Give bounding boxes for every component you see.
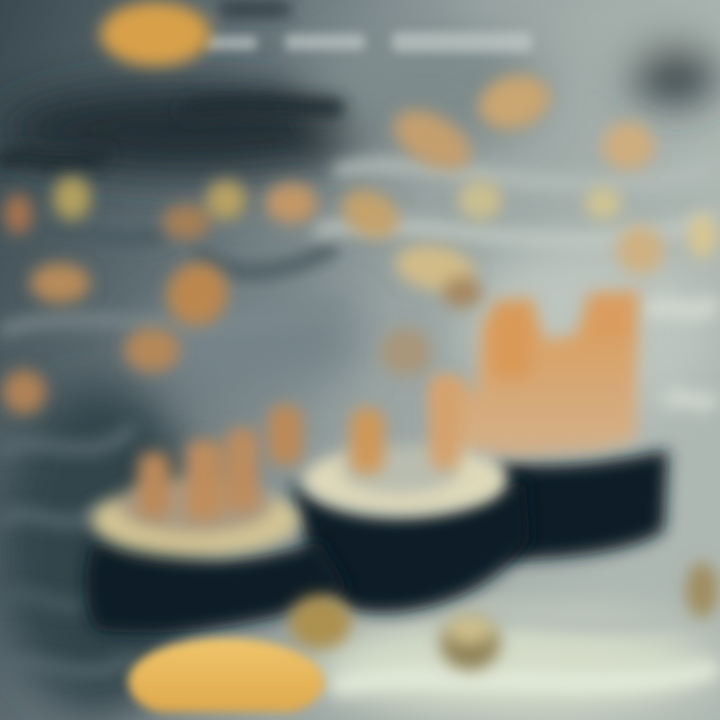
heading: blurred white title text blobs xyxy=(205,32,532,52)
bowl: left dark bowl with coins xyxy=(85,428,350,633)
coin stacks left xyxy=(138,428,258,520)
bowl body left xyxy=(85,540,350,633)
bowl body centre xyxy=(290,475,530,613)
icon: large coin bottom xyxy=(128,638,324,712)
bowl: centre dark bowl with coins xyxy=(268,378,530,613)
bowl body right xyxy=(500,450,668,560)
bowl rim left xyxy=(91,477,299,556)
icon: large coin top left xyxy=(100,2,290,66)
floating coins xyxy=(2,68,717,414)
icon: small coins on the ground xyxy=(289,562,718,670)
background: wavy ripples xyxy=(4,105,710,685)
coin stacks centre xyxy=(268,378,460,474)
coin stack right xyxy=(432,290,638,456)
bowl: right dark bowl with coin stack xyxy=(432,290,668,560)
bowl rim centre xyxy=(303,446,507,514)
